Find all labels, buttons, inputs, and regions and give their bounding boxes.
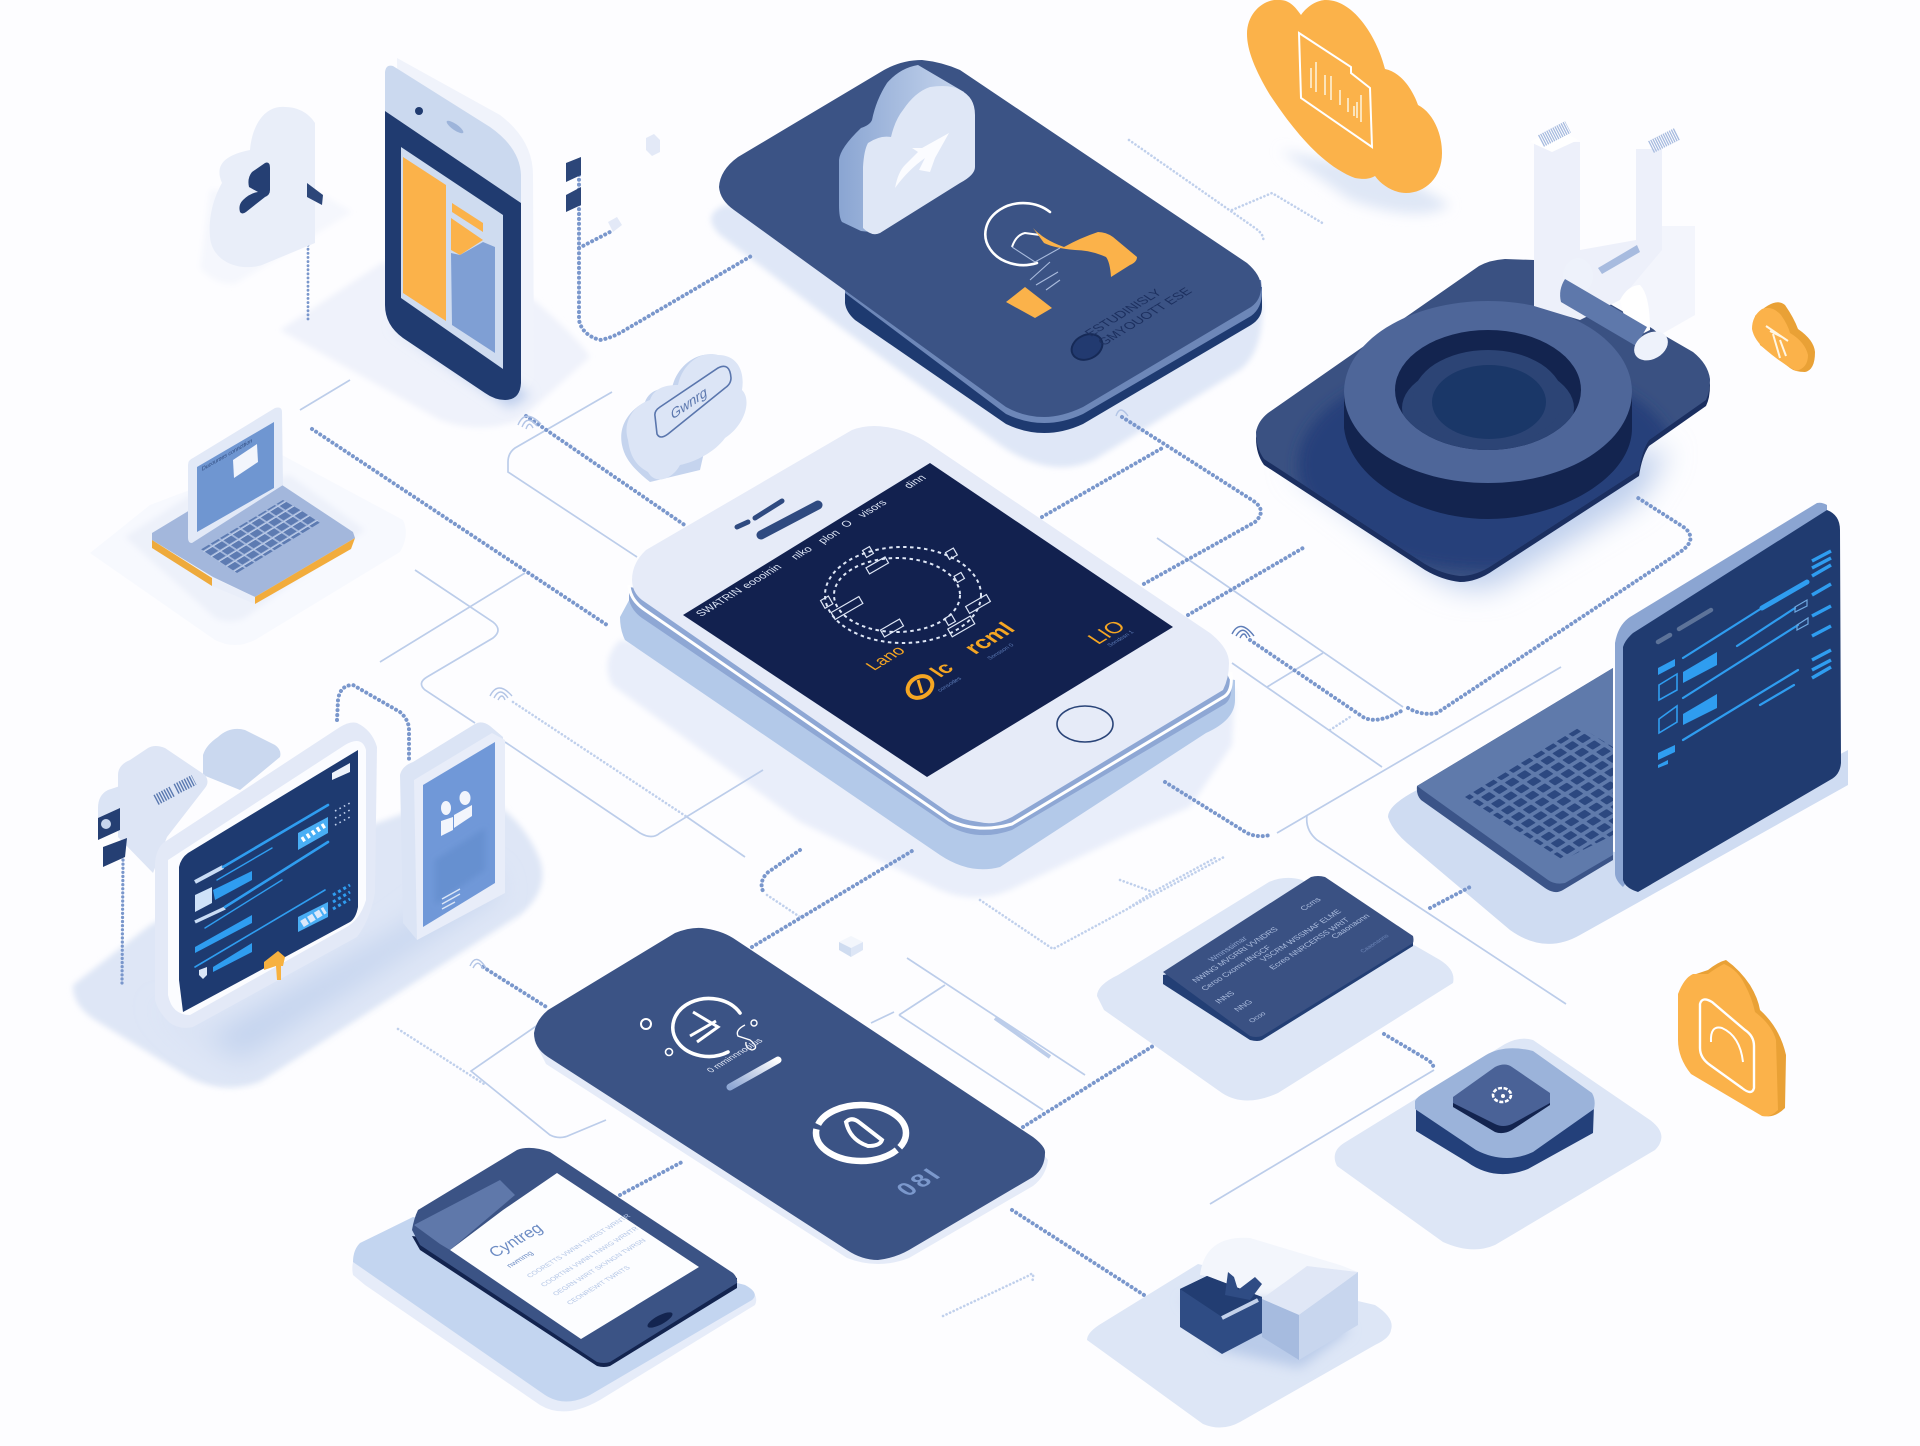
connector lines: pale dotted [398, 140, 1350, 1316]
phone camera and speaker [415, 107, 465, 135]
icon: small square tags [566, 157, 581, 212]
screen [450, 1173, 699, 1339]
caption and progress bar [704, 1036, 778, 1087]
dashed rings with nodes [821, 547, 990, 643]
icon: small cube [839, 936, 863, 957]
home button [1057, 706, 1113, 742]
icon: floating cubes [608, 134, 660, 232]
small blue captions: consodes [937, 676, 963, 693]
cloud label [655, 366, 731, 437]
barcode [156, 780, 194, 800]
top menu labels [694, 473, 929, 619]
white bracket [1530, 127, 1695, 340]
small blue captions [937, 630, 1136, 693]
top menu labels: O [839, 519, 856, 530]
orange labels: lc [925, 659, 959, 681]
panel: left tablet [155, 722, 377, 1028]
card text: VSCRM WSSINAF ELME [1258, 908, 1343, 963]
top menu labels: nlko [789, 545, 816, 562]
panel: main phone [620, 426, 1235, 869]
icon: cloud glyph [239, 163, 270, 214]
icon: small orange cloud [1752, 302, 1815, 372]
panel: centre cloud: Gwnrg [670, 384, 708, 424]
panel: bottom tablet [412, 1148, 737, 1367]
icon: small flag [307, 183, 323, 205]
icon: orange pin [264, 951, 285, 980]
screen text [485, 1214, 648, 1306]
orange labels: Lano [862, 643, 909, 673]
orange labels: LIO [1083, 617, 1131, 648]
connector lines: thin [300, 380, 1566, 1204]
dark logo and caption: ESTUDINISLY [1081, 286, 1165, 339]
ring icon two [816, 1105, 906, 1161]
card text: Wmnssimar [1206, 935, 1250, 963]
top menu labels: plon [816, 528, 843, 546]
panel: small cloud with icon, top left [210, 107, 315, 267]
panel: left laptop [152, 408, 355, 604]
roller [1560, 279, 1647, 346]
screen text: OEGRN WIRIT SKVNGN TWRSN [552, 1238, 648, 1297]
top menu labels: SWATRIN [694, 586, 746, 619]
speaker ring [1344, 301, 1632, 519]
tablet screen content [195, 763, 350, 979]
card text: Ocoo [1248, 1011, 1268, 1024]
striped artefact [414, 1180, 515, 1250]
small blue captions: Sondssn 1 [1107, 630, 1136, 648]
speakers [737, 501, 818, 535]
caption and progress bar: 0 mminnnooIus [704, 1036, 765, 1074]
ring icon with check [641, 998, 757, 1056]
icon: people [441, 791, 472, 836]
panel: centre right card [1163, 876, 1414, 1041]
panel: centre cloud [621, 354, 747, 482]
top menu labels: dinn [902, 473, 929, 491]
panel: charger cubes [1180, 1238, 1358, 1368]
laptop lid [188, 408, 283, 543]
small square tags [98, 808, 127, 867]
card text: Caaonanns [1360, 934, 1391, 954]
panel: left small phone [400, 722, 505, 940]
faded label: 08I [891, 1163, 949, 1200]
folder outline with bars [1299, 33, 1372, 147]
orange labels: rcml [958, 618, 1020, 658]
panel: small square device [1415, 1048, 1595, 1174]
card text [1190, 896, 1391, 1024]
dark logo and caption [1067, 285, 1196, 365]
top menu labels: visors [856, 498, 890, 520]
screen content [1658, 551, 1831, 768]
panel: left laptop: Ducourses conncttion [202, 438, 252, 473]
screen text: COORTNN VWNN TNWIG WRNTR [540, 1226, 641, 1288]
panel: top left smartphone [385, 58, 534, 408]
card text: NNG [1232, 998, 1255, 1013]
icon: orange headset cloud [1678, 960, 1786, 1116]
icon: orange folder cloud [1247, 0, 1442, 193]
card text: Caaonaonn [1329, 912, 1372, 940]
screen text: Cyntreg [485, 1220, 547, 1261]
screen text: COORETTS VWNN TWRIST WRNTR [526, 1214, 633, 1279]
laptop keyboard keys [1465, 727, 1613, 860]
panel: top dark card [719, 60, 1262, 433]
main phone screen [683, 463, 1173, 777]
card text: Ccms [1298, 896, 1323, 912]
screen text: nwmmg [504, 1250, 535, 1269]
square button [1453, 1064, 1550, 1133]
card text: NWING MVGRRI VVNDRS [1190, 926, 1280, 984]
caption bars [442, 889, 460, 909]
card text: Ecreo NNRCERSS WRIT [1267, 916, 1352, 971]
laptop keyboard [200, 500, 321, 573]
dark logo and caption: GMYOUOTT ESE [1094, 285, 1196, 348]
top menu labels: eoooinin [740, 562, 785, 591]
card text: Ceroo Cxomn ffNGCF [1199, 944, 1273, 992]
light cube [1262, 1266, 1358, 1360]
ring and hand icon [985, 203, 1137, 318]
card text: INNS [1213, 990, 1237, 1005]
orange labels [862, 617, 1131, 702]
home pill [646, 1309, 674, 1331]
panel: left camera body behind tablet [98, 729, 280, 873]
headset icon [1700, 999, 1754, 1092]
icon: cloud with bolt [839, 65, 975, 234]
icon: fingerprint connectors [470, 410, 1254, 969]
panel: right laptop [1417, 503, 1841, 892]
connector lines: dotted [122, 165, 1690, 1295]
phone screen [401, 147, 503, 369]
small blue captions: Sonsson 0 [987, 643, 1016, 661]
panel: right speaker on plate [1256, 127, 1710, 582]
panel: bottom dark card [534, 928, 1048, 1264]
screen text: CEONREWIT TWRITS [566, 1265, 633, 1306]
laptop screen [1615, 503, 1841, 892]
dark cube [1180, 1272, 1262, 1354]
